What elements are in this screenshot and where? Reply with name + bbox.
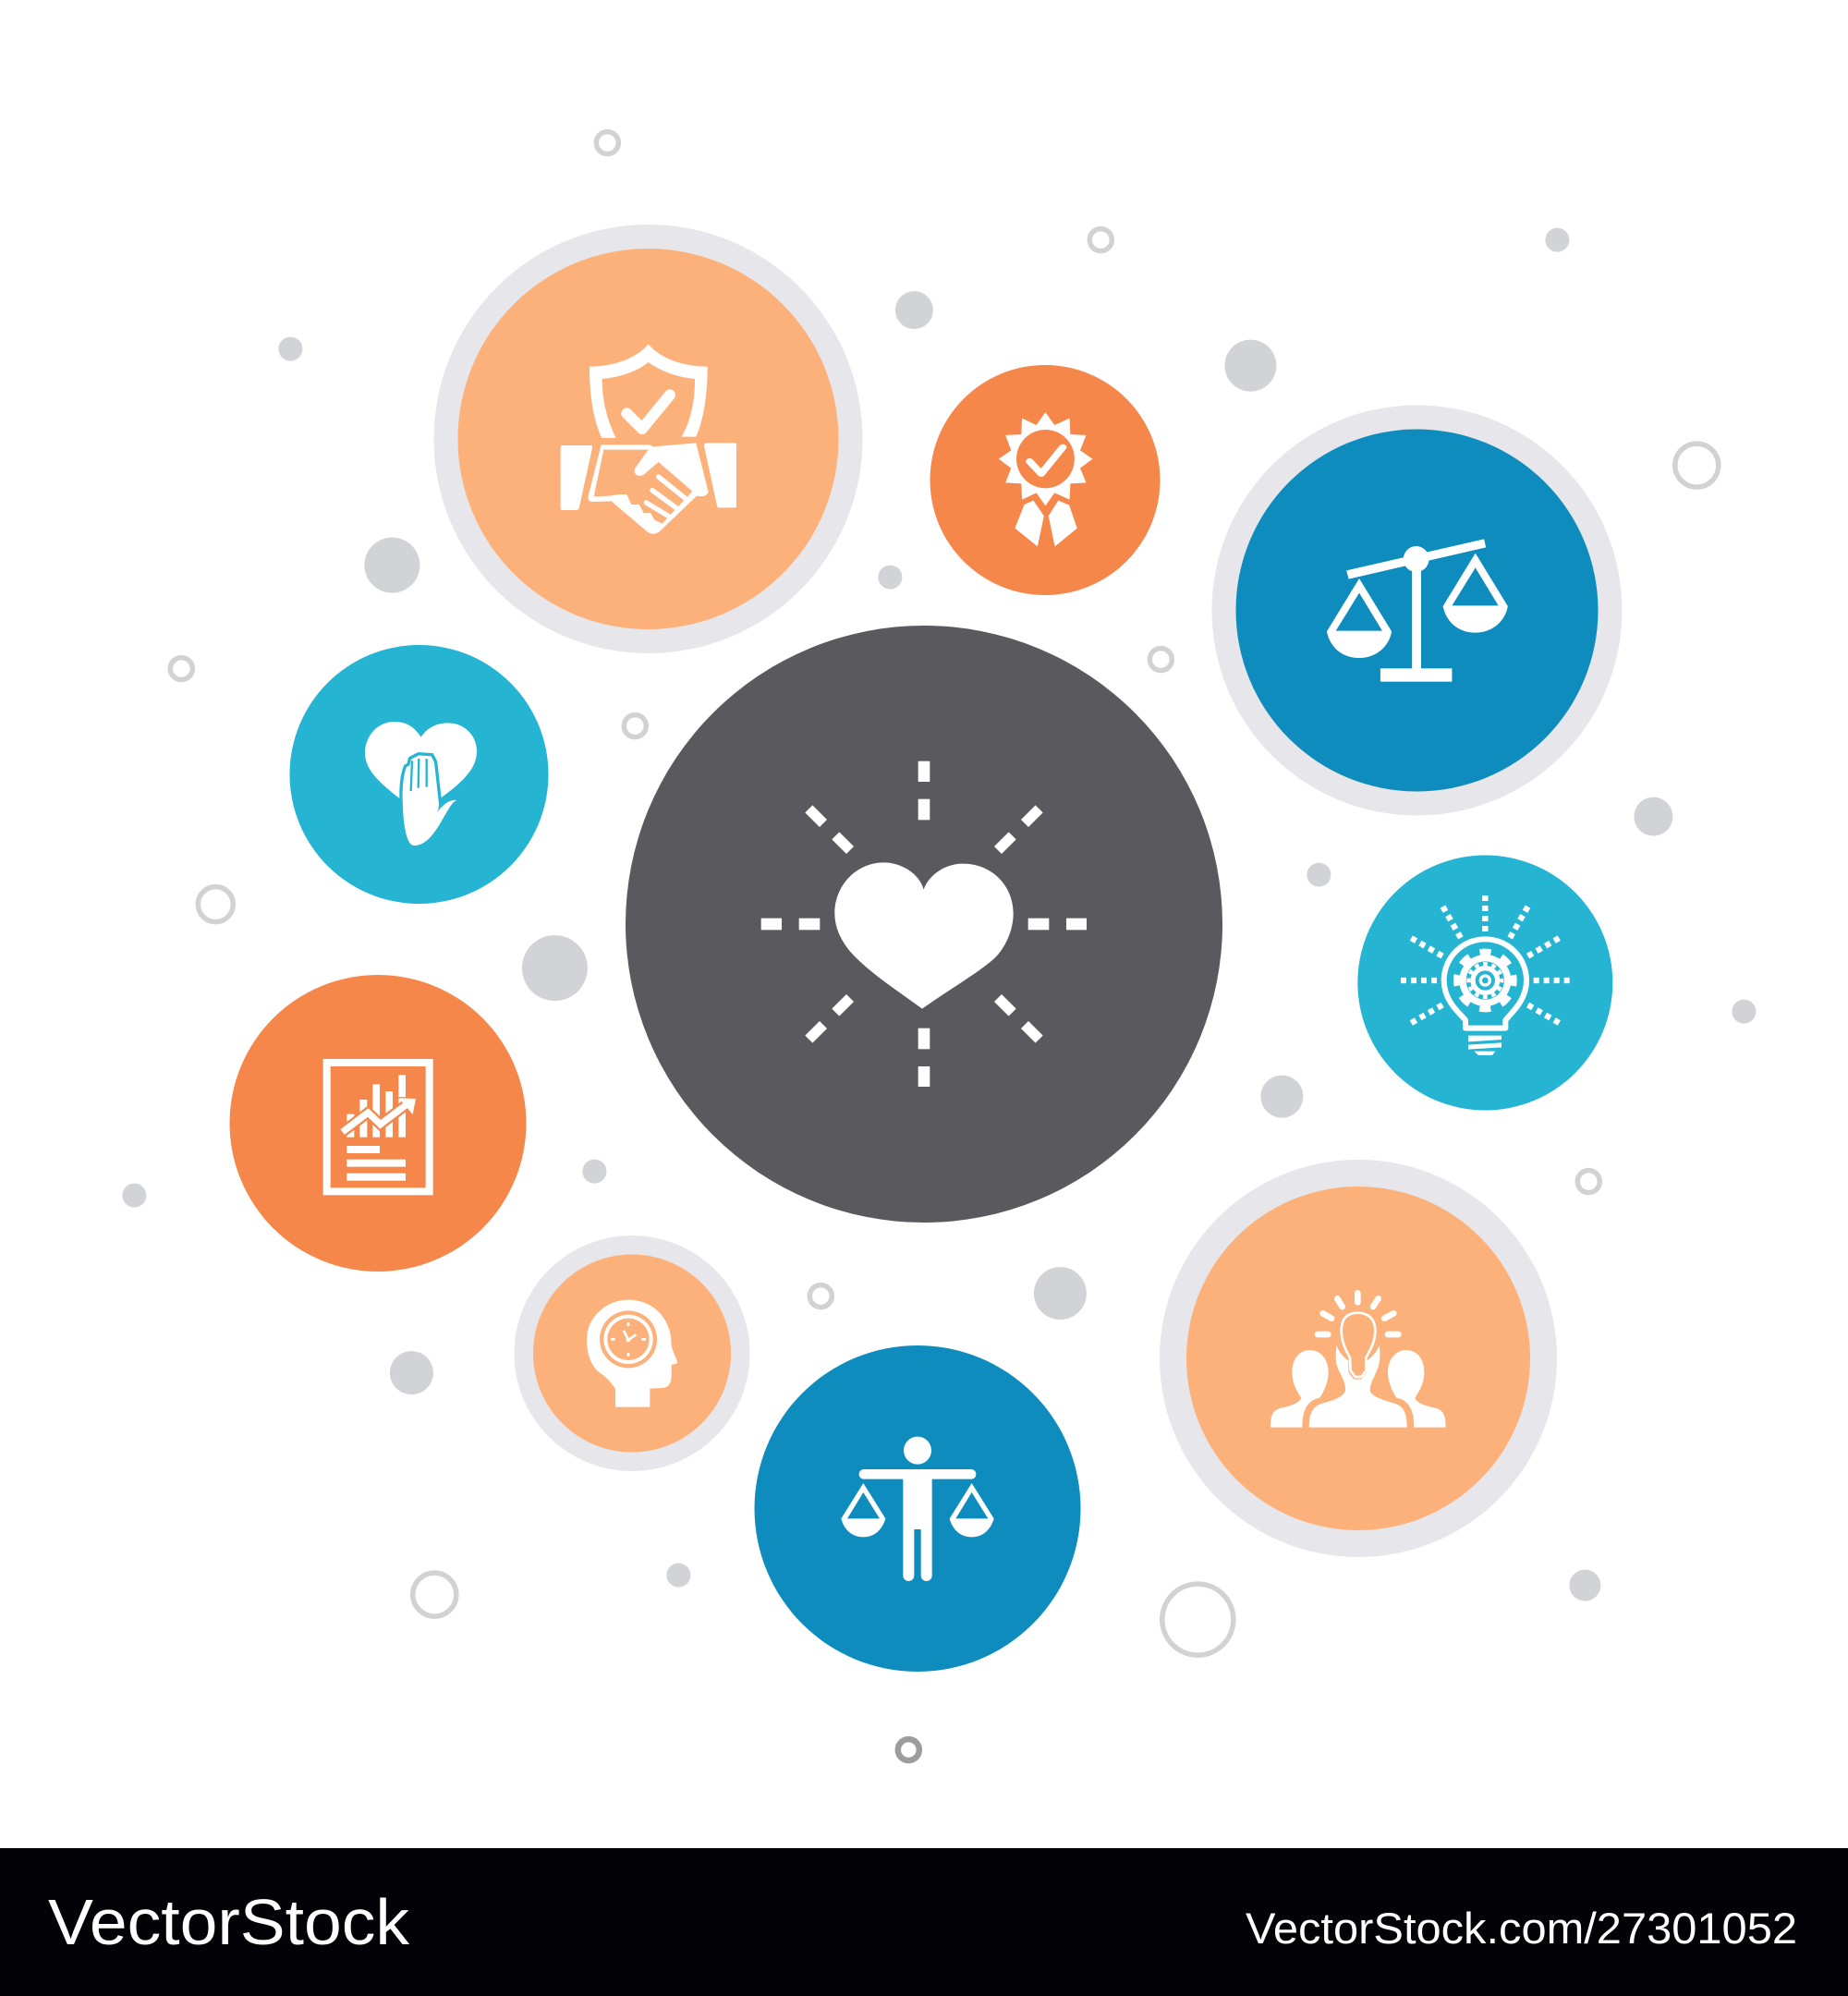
inner circle <box>458 249 839 629</box>
outer ring <box>1212 405 1623 815</box>
footer image reference: VectorStock.com/27301052 <box>1246 1904 1797 1953</box>
outer ring <box>1160 1160 1557 1557</box>
teal circle <box>1357 856 1612 1111</box>
panel: central heart bubble <box>626 626 1222 1223</box>
teal circle <box>290 645 549 904</box>
orange circle <box>229 975 527 1272</box>
orange circle <box>930 365 1161 595</box>
panel: idea gear bulb bubble <box>1357 856 1612 1111</box>
footer brand name: VectorStock <box>48 1886 410 1958</box>
icon: hand over heart <box>365 722 477 846</box>
panel: hand on heart bubble <box>290 645 549 904</box>
icon: person holding scales <box>841 1437 994 1581</box>
filled background dots <box>122 228 1756 1601</box>
icon: rosette medal <box>999 412 1092 546</box>
inner circle <box>1186 1187 1530 1530</box>
icon: radiant heart <box>761 761 1087 1087</box>
footer bar <box>0 1848 1848 1996</box>
icon: tilted scale <box>1327 539 1508 682</box>
outer ring <box>514 1235 750 1471</box>
outer ring <box>434 225 863 653</box>
outlined background rings <box>170 132 1719 1760</box>
panel: award medal bubble <box>930 365 1161 595</box>
panel: mind clock bubble <box>514 1235 750 1471</box>
icon: head with clock <box>587 1300 677 1407</box>
icon: shield and handshake <box>561 344 736 534</box>
panel: balance scale bubble <box>1212 405 1623 815</box>
inner circle <box>1236 429 1599 791</box>
icon: people with light bulb <box>1270 1293 1446 1428</box>
blue circle <box>754 1345 1081 1672</box>
panel: trust handshake bubble <box>434 225 863 653</box>
panel: person balance bubble <box>754 1345 1081 1672</box>
icon: chart report document <box>327 1063 430 1191</box>
panel: team idea bubble <box>1160 1160 1557 1557</box>
panel: report bubble <box>229 975 527 1272</box>
central dark circle <box>626 626 1222 1223</box>
icon: gear light bulb <box>1401 895 1570 1055</box>
inner circle <box>533 1255 731 1453</box>
